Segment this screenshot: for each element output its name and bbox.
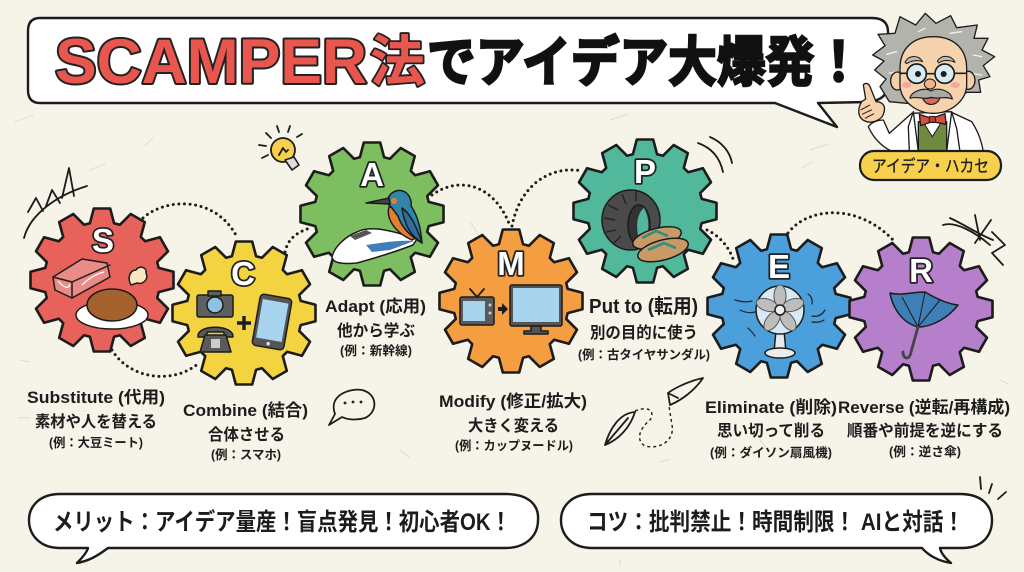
icon: wind lines [735,294,825,336]
text: Modify: Modify (修正/拡大) [439,392,587,411]
icon: speech doodle [329,390,374,425]
icon: inverted umbrella [890,292,958,358]
icon: camera [197,291,233,317]
title: 法: 法 [370,31,425,93]
hair highlights [887,28,982,75]
text: Modify [439,392,587,453]
letter M: M [497,245,525,282]
icon: tire [602,190,660,250]
eyebrows [905,56,955,64]
title speech bubble [28,18,888,127]
panel: M Modify gear [440,230,582,372]
icon: bullet train [332,229,417,263]
panel: P Put to gear [574,140,716,282]
icon: telephone [198,327,233,352]
callout: merits [29,494,538,563]
dotted connectors [112,170,893,376]
lab coat and arm [868,112,983,152]
icon: smartphone [252,294,292,350]
text: Adapt: Adapt (応用) [325,297,426,316]
text: Put to [578,295,710,362]
icon: meat [53,259,110,298]
icon: arrow [498,303,508,315]
character: Idea Hakase [859,13,995,152]
doodle: top-left scribble [24,168,87,238]
icon: paper plane and feather [605,378,703,447]
panel: R Reverse gear [850,238,992,380]
text: Reverse: Reverse (逆転/再構成) [838,397,1010,417]
letter C: C [231,255,255,292]
glasses [900,64,967,83]
gear C [172,242,316,384]
mustache [910,89,952,99]
text: Adapt: (例：新幹線) [340,343,412,358]
cheeks [902,82,960,88]
tips text: コツ：批判禁止！時間制限！ AIと対話！ [587,509,964,536]
text: Reverse: 順番や前提を逆にする [847,421,1003,440]
text: Substitute: Substitute (代用) [27,388,165,407]
ears [891,71,975,90]
text: Combine: Combine (結合) [183,401,308,420]
icon: sandals [630,222,691,266]
icon: light bulb [259,126,302,170]
text: Combine: (例：スマホ) [211,448,281,462]
text: Combine [183,401,308,462]
text: Put to: 別の目的に使う [590,324,698,342]
text: Reverse: (例：逆さ傘) [889,444,961,459]
mouth [923,98,940,104]
text: Adapt: 他から学ぶ [337,321,415,340]
icon: kingfisher [366,190,422,243]
text: Substitute: 素材や人を替える [35,412,157,431]
icon: plate with soy patty [76,289,148,329]
gear R [850,238,992,380]
gear A [300,142,444,286]
text: Adapt [325,297,426,358]
text: Combine: 合体させる [208,426,285,444]
text: Eliminate [705,398,837,460]
name plate [860,151,1001,180]
doodle: sparks [980,477,1006,499]
text: Put to: (例：古タイヤサンダル) [578,347,710,362]
gear P [574,140,716,282]
text: Eliminate: (例：ダイソン扇風機) [710,445,832,460]
text: Reverse [838,397,1010,459]
letter E: E [768,248,790,285]
gear M [440,230,582,372]
title: SCAMPER: SCAMPER [55,27,367,97]
gear E [708,234,850,378]
text: Substitute [27,388,165,450]
nose [924,79,936,89]
icon: plus [237,316,251,330]
letter P: P [634,153,656,190]
text: Substitute: (例：大豆ミート) [49,435,143,450]
title: rest: でアイデア大爆発！ [427,33,863,93]
text: Put to: Put to (転用) [589,295,698,318]
icon: electric fan [755,285,805,358]
pointing hand [859,83,884,122]
icon: large monitor [510,285,562,334]
panel: S Substitute gear [30,208,174,352]
text: Eliminate: 思い切って削る [717,422,825,440]
doodle: hatch lines by R [943,215,1005,265]
callout: tips [561,494,992,563]
text: Modify: 大きく変える [468,416,559,435]
text: Modify: (例：カップヌードル) [455,439,573,453]
bubble [561,494,992,563]
panel: A Adapt gear [300,142,444,286]
icon: puff [129,267,147,285]
gear S [30,208,174,352]
text: Eliminate: Eliminate (削除) [705,398,837,417]
panel: E Eliminate gear [708,234,850,378]
face [900,37,967,113]
letter S: S [92,222,114,259]
hair [873,13,995,103]
letter R: R [909,252,933,289]
merits text: メリット：アイデア量産！盲点発見！初心者OK！ [53,508,511,536]
letter A: A [360,156,384,193]
bubble [29,494,538,563]
panel: C Combine gear [172,242,316,384]
title [55,27,863,97]
doodle: motion lines by P [698,137,732,172]
icon: small TV [460,289,494,325]
name plate text: アイデア・ハカセ [872,156,989,176]
vest and bow tie [908,112,960,152]
